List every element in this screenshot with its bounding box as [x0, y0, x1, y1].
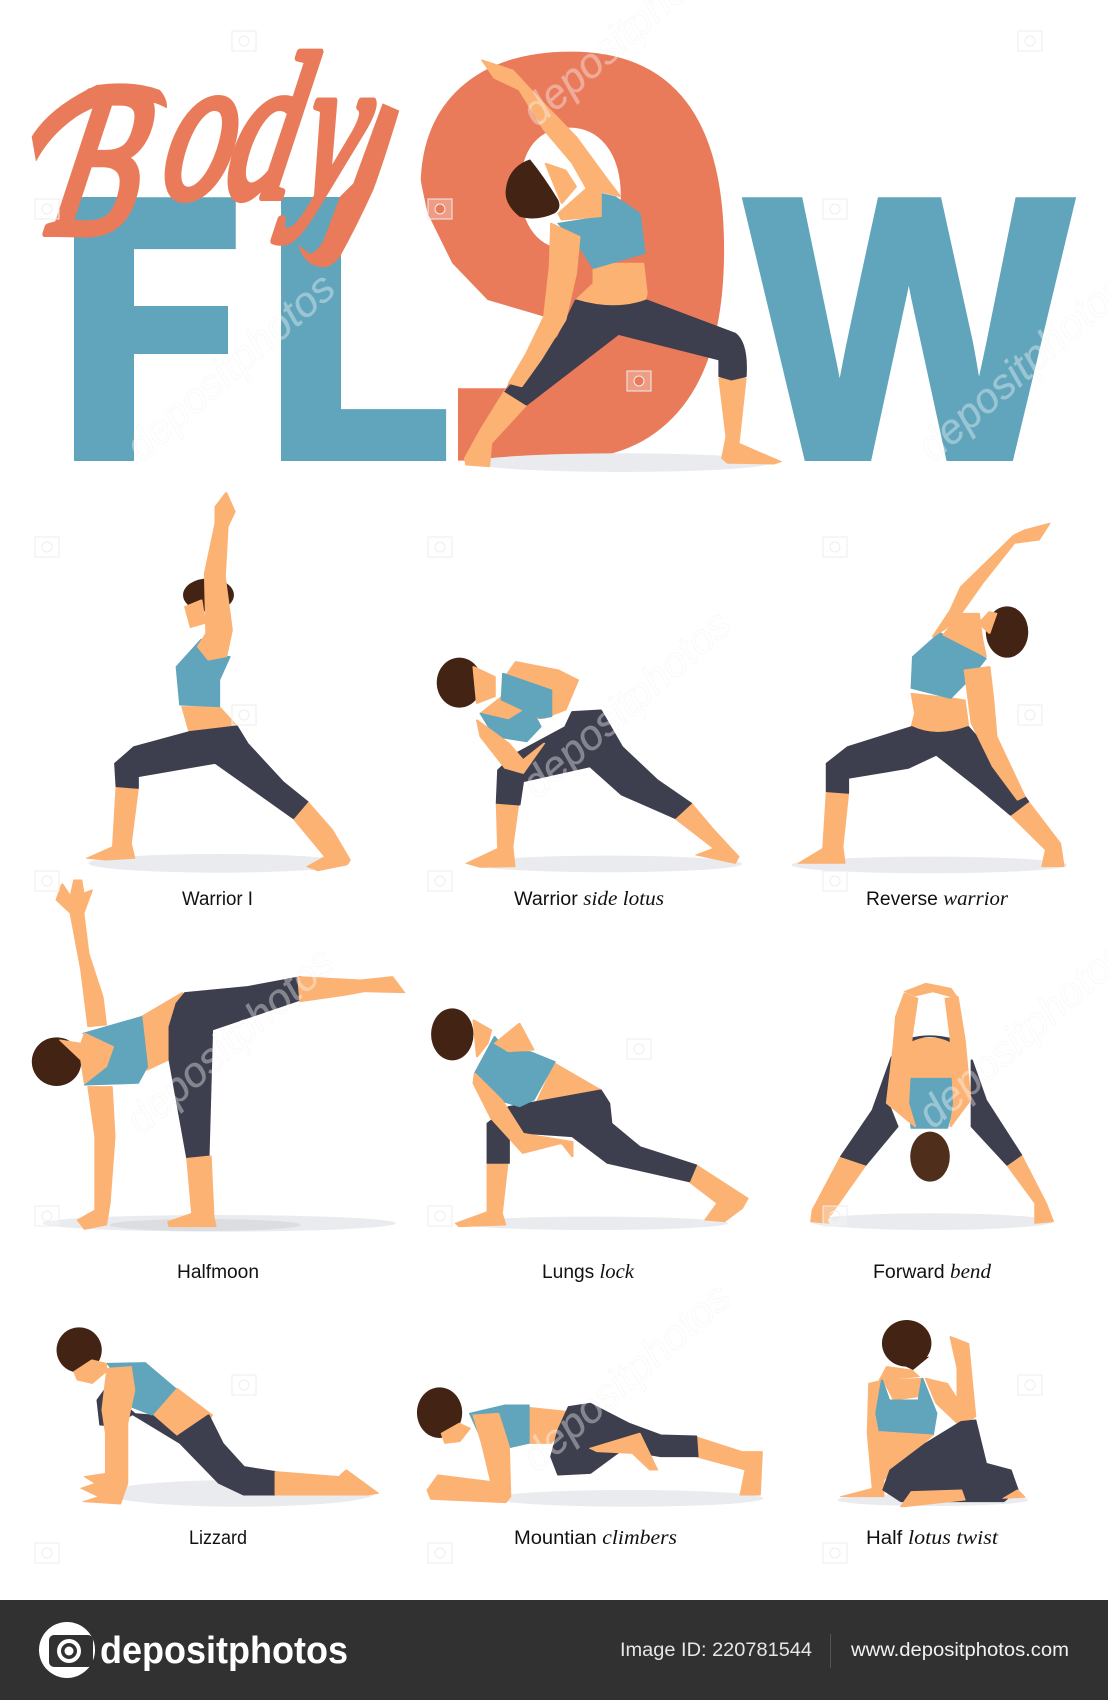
- figure: warrior side lotus: [437, 658, 742, 872]
- pose labels: Warrior side lotus: [514, 888, 664, 910]
- figure: mountain climbers: [417, 1387, 763, 1507]
- brand name: depositphotos: [100, 1630, 348, 1672]
- figure: lungs lock: [431, 1008, 748, 1230]
- pose labels: Half lotus twist: [866, 1527, 999, 1549]
- pose labels: [177, 888, 1009, 1549]
- pose labels: Lungs lock: [542, 1261, 635, 1283]
- figure: forward bend: [810, 983, 1053, 1230]
- pose labels: Warrior I: [182, 889, 253, 910]
- figure: reverse warrior: [792, 523, 1067, 873]
- diagonal watermarks: depositphotos: [512, 600, 740, 807]
- pose labels: Forward bend: [873, 1261, 992, 1283]
- icon: camera logo: [39, 1622, 95, 1678]
- website: www.depositphotos.com: [850, 1640, 1069, 1661]
- image id: Image ID: 220781544: [620, 1640, 812, 1661]
- diagonal watermarks: depositphotos: [116, 263, 344, 470]
- figure: halfmoon: [32, 880, 404, 1232]
- title script Body: B: [34, 42, 171, 281]
- figure: warrior I: [87, 493, 350, 873]
- pose labels: Halfmoon: [177, 1262, 259, 1283]
- title word FLOW letters: [59, 124, 1073, 534]
- diagonal watermarks: depositphotos: [512, 1273, 740, 1480]
- pose labels: Mountian climbers: [514, 1527, 677, 1549]
- footer bar: [0, 1600, 1108, 1700]
- title script Body: [32, 12, 399, 281]
- title word FLOW letters: L: [266, 124, 451, 534]
- diagonal watermarks: depositphotos: [116, 937, 344, 1144]
- title script Body: ody: [147, 12, 394, 242]
- hero figure: reverse warrior over the nine: [465, 60, 781, 472]
- pose labels: Reverse warrior: [866, 888, 1009, 910]
- figure: lizzard: [57, 1327, 378, 1507]
- figure: half lotus twist: [837, 1320, 1028, 1507]
- pose labels: Lizzard: [189, 1528, 247, 1549]
- diagonal watermarks: [116, 0, 1108, 1480]
- title word FLOW letters: W: [748, 124, 1073, 534]
- title word FLOW letters: F: [59, 124, 242, 534]
